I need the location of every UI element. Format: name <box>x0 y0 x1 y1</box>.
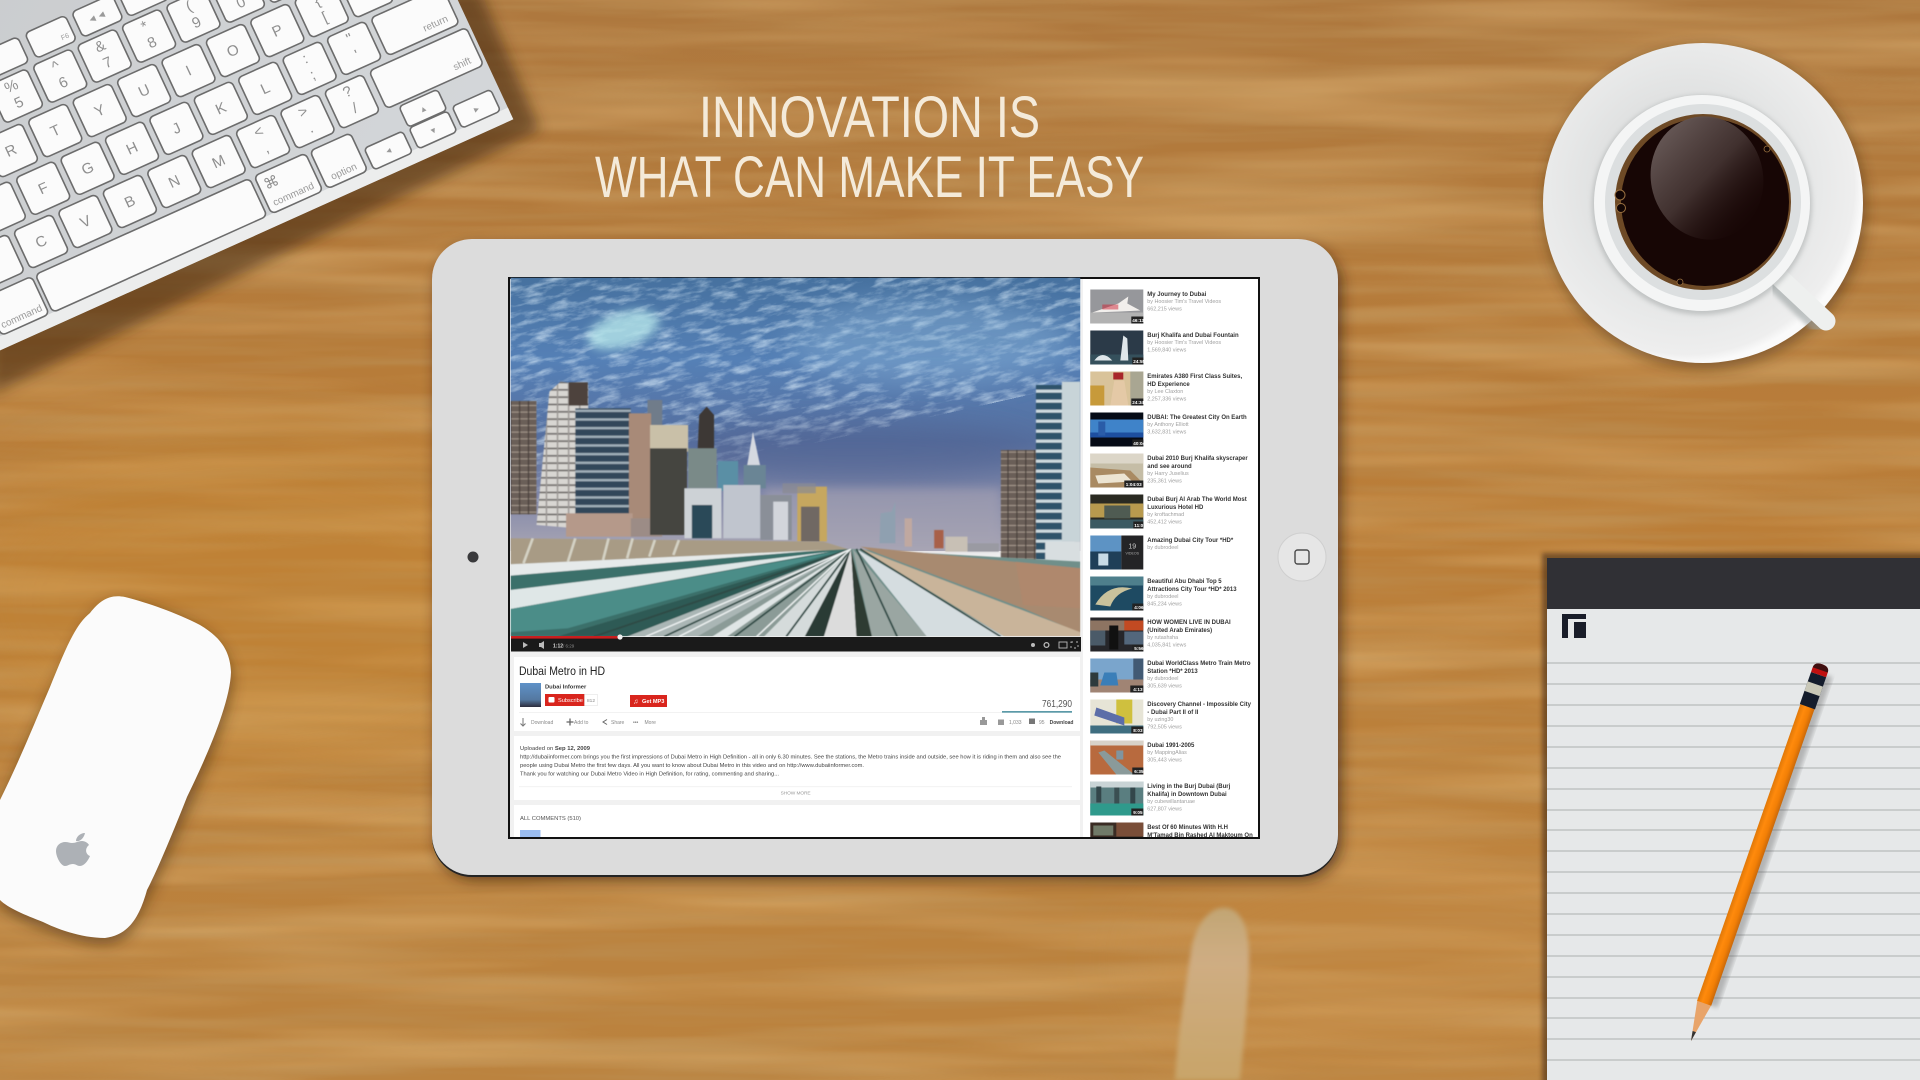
keys: home row: : <box>300 50 311 67</box>
keys: QWERTY row: T <box>48 121 63 141</box>
video item 3: HD Experience <box>1147 382 1190 388</box>
tablet body <box>432 239 1338 875</box>
show more: SHOW MORE <box>781 790 811 796</box>
get mp3 button <box>630 695 667 707</box>
get mp3 button: Get MP3 <box>642 699 664 705</box>
keys: home row: " <box>344 30 356 48</box>
keys: QWERTY row: P <box>269 21 286 41</box>
action row <box>520 717 1073 726</box>
video item 10 <box>1090 658 1251 692</box>
video item 4: 3,632,831 views <box>1147 430 1187 436</box>
description text: Thank you for watching our Dubai Metro Video in High Definition, for rating, commenting and sharing... <box>520 772 779 778</box>
subscribe button: 812 <box>587 698 595 704</box>
video item 6: 11:01 <box>1134 523 1146 528</box>
keys: number row: 9 <box>189 13 204 32</box>
railway <box>511 538 1080 637</box>
action row: More <box>644 720 656 726</box>
keys: space row and arrows: ⌘ <box>261 172 282 194</box>
keys: QWERTY row: I <box>183 63 194 80</box>
keys: QWERTY row: O <box>224 41 242 61</box>
keys: bottom letter row: V <box>78 212 94 232</box>
keys: QWERTY row: [ <box>319 9 331 26</box>
video item 14: M'Tamad Bin Rashed Al Maktoum On <box>1147 833 1253 839</box>
video item 9: 5:56 <box>1134 646 1144 651</box>
video controls: 1:12 <box>553 644 563 650</box>
cup rim <box>1592 95 1812 315</box>
sky <box>510 278 1080 553</box>
subscribe button: Subscribe <box>558 698 583 704</box>
video item 12: 305,443 views <box>1147 758 1182 764</box>
action row: Download <box>1050 720 1073 726</box>
video item 13: Living in the Burj Dubai (Burj <box>1147 784 1231 790</box>
video item 5 <box>1090 454 1248 488</box>
coffee <box>1615 114 1791 290</box>
video item 10: Dubai WorldClass Metro Train Metro <box>1147 661 1251 667</box>
keys: bottom letter row: ? <box>340 83 355 102</box>
apple logo <box>56 833 90 866</box>
keys: home row <box>0 0 459 256</box>
progress bar <box>511 636 619 639</box>
video item 2: Burj Khalifa and Dubai Fountain <box>1147 333 1239 339</box>
ruled lines <box>1547 663 1920 1060</box>
keys: number row: ^ <box>49 58 63 76</box>
keys: space row and arrows: command <box>0 303 44 331</box>
keys: bottom letter row: / <box>350 99 361 117</box>
description text: http://dubaiinformer.com brings you the first impressions of Dubai Metro in High Definition - all in only 6.30 minutes. See the stations, the Metro trains inside and outside, see how it is riding in them and also see the <box>520 754 1061 760</box>
video item 9 <box>1090 618 1231 652</box>
keys: home row: F <box>36 179 51 198</box>
heading: WHAT CAN MAKE IT EASY <box>595 145 1144 210</box>
video item 3: 24:34 <box>1132 400 1144 405</box>
action row: ••• <box>633 720 639 726</box>
keys: QWERTY row <box>0 0 439 198</box>
video item 1: 46:13 <box>1132 318 1144 323</box>
description text <box>520 754 1061 778</box>
keys: function row <box>0 0 403 80</box>
video item 14: Best Of 60 Minutes With H.H <box>1147 825 1228 831</box>
keys: QWERTY row: U <box>136 81 153 101</box>
keys: QWERTY row: R <box>3 141 20 161</box>
keys: home row: H <box>124 139 141 159</box>
finger <box>1175 908 1249 1080</box>
comments heading: ALL COMMENTS (510) <box>520 816 581 822</box>
view count: 761,290 <box>1042 699 1072 710</box>
camera <box>468 552 478 562</box>
video item 1: 662,215 views <box>1147 306 1182 312</box>
video item 3: Emirates A380 First Class Suites, <box>1147 374 1242 380</box>
coffee cup and saucer <box>1543 43 1866 369</box>
keys: function row: ◄◄ <box>86 9 109 27</box>
keys: number row: & <box>92 37 108 56</box>
video item 7 <box>1090 536 1234 570</box>
video item 2: 1,569,840 views <box>1147 348 1187 354</box>
video item 11: - Dubai Part II of II <box>1147 710 1199 716</box>
keys: number row: 8 <box>145 33 160 52</box>
keys: bottom letter row: . <box>305 120 316 137</box>
notepad paper <box>1547 608 1920 1080</box>
notepad <box>1542 553 1920 1080</box>
keys: bottom letter row: , <box>261 140 272 157</box>
video item 3: 2,257,336 views <box>1147 396 1187 402</box>
video item 8: 845,234 views <box>1147 602 1182 608</box>
keyboard <box>0 0 540 533</box>
video item 12: by MappingAlias <box>1147 750 1187 756</box>
video item 11: by uzing30 <box>1147 717 1173 723</box>
video item 13 <box>1090 782 1231 816</box>
video item 2: by Hoosier Tim's Travel Videos <box>1147 340 1221 346</box>
keys: space row and arrows: ▼ <box>428 125 439 136</box>
video item 10: Station *HD* 2013 <box>1147 669 1198 675</box>
video item 9: by rutashsha <box>1147 635 1178 641</box>
description text: people using Dubai Metro the first few days. All you want to know about Dubai Metro in this video and on http://www.dubaiinformer.com. <box>520 763 864 769</box>
video item 6: Dubai Burj Al Arab The World Most <box>1147 497 1247 503</box>
action row: Share <box>611 720 625 726</box>
video item 7: Amazing Dubai City Tour *HD* <box>1147 538 1234 544</box>
video item 6: Luxurious Hotel HD <box>1147 505 1204 511</box>
action row: Download <box>531 720 553 726</box>
action row: 95 <box>1039 720 1045 726</box>
pencil eraser <box>1811 662 1830 677</box>
video item 13: by cubewillantaruae <box>1147 799 1195 805</box>
pencil wood tip <box>1684 1000 1712 1043</box>
right skyline <box>879 382 1080 565</box>
keys: bottom letter row: shift <box>452 56 473 73</box>
keys: home row: L <box>258 79 273 98</box>
upload date: Uploaded on Sep 12, 2009 <box>520 746 591 752</box>
video controls <box>511 634 1081 652</box>
keys: number row: 7 <box>100 53 115 72</box>
video item 9: (United Arab Emirates) <box>1147 628 1212 634</box>
keys: home row: J <box>170 120 184 138</box>
video item 8: by dubrodeel <box>1147 594 1178 600</box>
video item 12: 6:35 <box>1134 769 1144 774</box>
video item 9: 4,035,841 views <box>1147 642 1187 648</box>
video item 14 <box>1090 822 1252 837</box>
action row: 1,033 <box>1009 720 1022 726</box>
video item 1 <box>1090 290 1221 324</box>
keys: space row and arrows: ◄ <box>383 145 394 157</box>
video title: Dubai Metro in HD <box>519 664 605 678</box>
pencil <box>1683 662 1835 1046</box>
video item 4 <box>1090 412 1247 446</box>
video item 13: 9:05 <box>1133 810 1143 815</box>
video item 12: Dubai 1991-2005 <box>1147 743 1195 749</box>
video item 6: 452,412 views <box>1147 520 1182 526</box>
keys: bottom letter row: > <box>296 103 311 122</box>
video item 3: by Lee Claxton <box>1147 389 1183 395</box>
heading <box>595 85 1144 210</box>
action row: Add to <box>574 720 589 726</box>
keys: space row and arrows <box>0 69 501 337</box>
video item 8: 4:06 <box>1134 605 1144 610</box>
left skyline <box>511 382 827 542</box>
video item 6: by kroftachmad <box>1147 512 1184 518</box>
sidebar: suggested videos <box>1083 279 1258 856</box>
video item 8 <box>1090 576 1237 610</box>
video item 11: 8:03 <box>1133 728 1143 733</box>
video item 11: Discovery Channel - Impossible City <box>1147 702 1252 708</box>
video item 11 <box>1090 700 1252 734</box>
keys: space row and arrows: ▲ <box>418 103 429 115</box>
keys: bottom letter row: B <box>122 192 138 212</box>
video item 9: HOW WOMEN LIVE IN DUBAI <box>1147 620 1231 626</box>
rating bar <box>519 711 1072 713</box>
video item 13: 627,807 views <box>1147 806 1182 812</box>
keys: space row and arrows: option <box>329 162 359 183</box>
keys: number row: 5 <box>12 93 26 112</box>
keys: bottom letter row: N <box>166 172 183 192</box>
tablet <box>426 236 1352 890</box>
keys: home row: ' <box>352 47 362 63</box>
video item 2 <box>1090 330 1239 364</box>
video item 4: by Anthony Elliott <box>1147 422 1189 428</box>
channel name: Dubai Informer <box>545 684 587 690</box>
saucer <box>1543 43 1863 363</box>
screen <box>508 277 1260 839</box>
subscribe button <box>545 694 598 706</box>
video item 7: VIDEOS <box>1126 552 1140 556</box>
video item 5: and see around <box>1147 464 1192 470</box>
video player <box>510 278 1080 636</box>
video item 5: by Harry Juselius <box>1147 471 1189 477</box>
keys: number row: * <box>138 18 151 36</box>
pencil ferrule <box>1800 672 1826 709</box>
heading: INNOVATION IS <box>699 85 1040 150</box>
video item 1: by Hoosier Tim's Travel Videos <box>1147 299 1221 305</box>
keys: home row: ; <box>307 67 318 84</box>
home button <box>1278 533 1326 581</box>
description card <box>514 736 1080 800</box>
video item 5: 235,361 views <box>1147 478 1182 484</box>
video item 6 <box>1090 494 1247 528</box>
video controls: / 6:29 <box>563 644 575 648</box>
keys: number row: % <box>2 76 21 97</box>
keys: space row and arrows: ► <box>471 104 482 115</box>
video item 4: DUBAI: The Greatest City On Earth <box>1147 415 1247 421</box>
keys: number row: 6 <box>56 73 71 92</box>
pencil body <box>1697 701 1815 1006</box>
video item 10: 4:13 <box>1133 687 1143 692</box>
keys: home row: G <box>79 159 97 179</box>
comment avatar <box>520 830 540 837</box>
video item 7: by dubrodeel <box>1147 545 1178 551</box>
video item 7: 19 <box>1128 544 1136 550</box>
keys: bottom letter row: M <box>210 152 228 172</box>
video item 10: by dubrodeel <box>1147 676 1178 682</box>
get mp3 button: ♫ <box>633 698 638 706</box>
keys: number row <box>0 0 355 144</box>
video item 13: Khalifa) in Downtown Dubai <box>1147 792 1227 798</box>
video item 3 <box>1090 372 1242 406</box>
keys: function row: F6 <box>60 32 71 42</box>
notepad header band <box>1547 558 1920 609</box>
channel avatar <box>520 683 541 707</box>
video item 8: Attractions City Tour *HD* 2013 <box>1147 587 1237 593</box>
mouse <box>0 596 232 944</box>
video item 8: Beautiful Abu Dhabi Top 5 <box>1147 579 1222 585</box>
video info card <box>514 657 1080 731</box>
video item 2: 24:55 <box>1133 359 1145 364</box>
keys: bottom letter row: < <box>251 123 267 142</box>
notepad logo <box>1562 614 1586 638</box>
video item 1: My Journey to Dubai <box>1147 292 1207 298</box>
comments card <box>514 805 1080 839</box>
keys: space row and arrows: command <box>271 181 316 209</box>
keys: bottom letter row: C <box>33 232 50 252</box>
video item 11: 792,505 views <box>1147 724 1182 730</box>
video item 4: 40:04 <box>1133 441 1145 446</box>
video item 5: Dubai 2010 Burj Khalifa skyscraper <box>1147 456 1248 462</box>
video item 10: 305,639 views <box>1147 684 1182 690</box>
keys: home row: K <box>213 99 229 119</box>
keys: QWERTY row: Y <box>92 101 108 121</box>
keys: home row: return <box>422 14 450 34</box>
video item 5: 1:04:03 <box>1126 482 1142 487</box>
keys: bottom letter row <box>0 27 484 289</box>
cup handle <box>1777 276 1826 325</box>
mouse body <box>0 596 231 938</box>
video item 12 <box>1090 740 1195 774</box>
